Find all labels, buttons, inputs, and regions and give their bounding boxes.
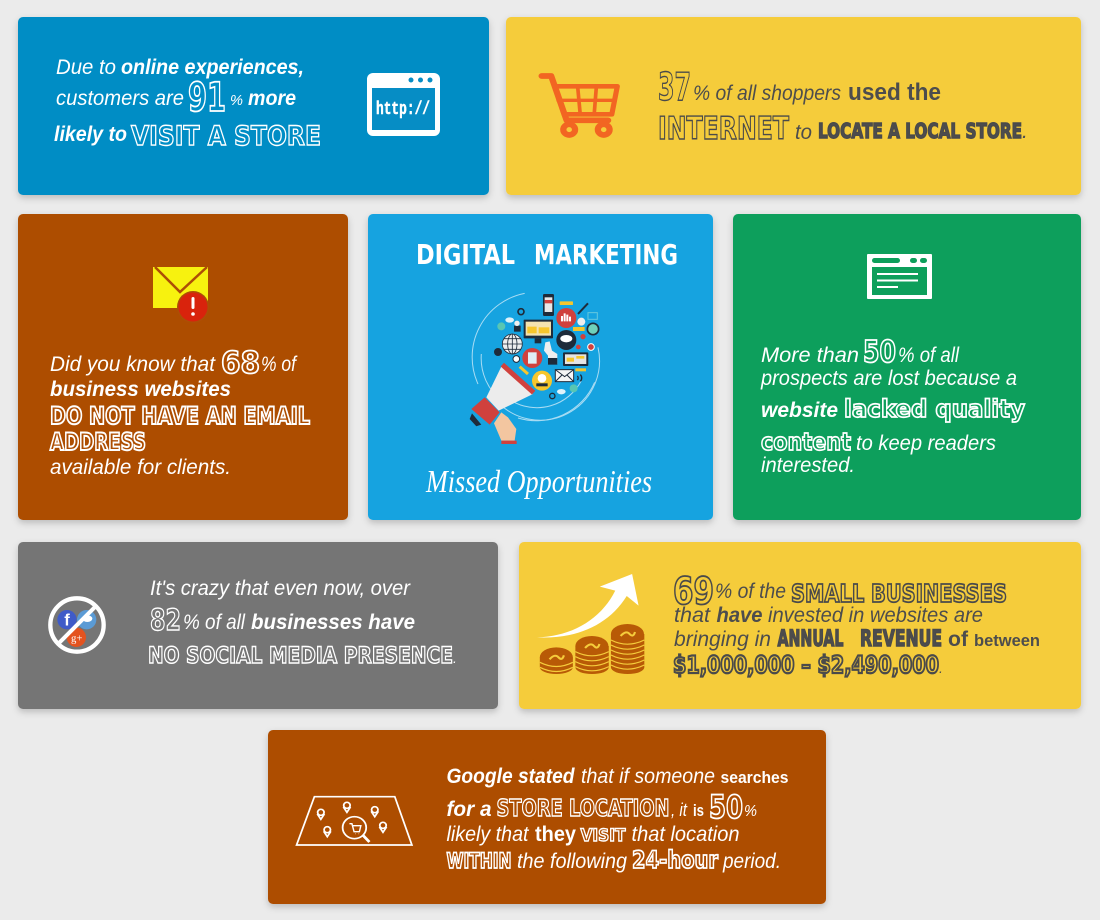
- text: revenue statistic: invested in websites are: [768, 604, 983, 627]
- text: revenue statistic: bringing in: [674, 628, 771, 651]
- text: social media statistic: It's crazy that even now, over: [150, 577, 411, 600]
- icon: map with search: [297, 797, 412, 845]
- text: lost prospects statistic: interested.: [761, 454, 855, 477]
- text: revenue statistic: .: [939, 660, 943, 676]
- text: google statistic: VISIT: [580, 826, 626, 846]
- text: lost prospects statistic: to keep readers: [856, 432, 996, 455]
- text: google statistic: Google stated: [446, 765, 576, 788]
- text: google statistic: the following: [517, 850, 627, 873]
- text: email statistic: DO NOT HAVE AN EMAIL: [50, 402, 310, 430]
- text: internet statistic: INTERNET: [658, 111, 789, 147]
- text: google statistic: WITHIN: [446, 849, 512, 873]
- text: internet statistic: % of all shoppers: [693, 82, 841, 105]
- text: google statistic: STORE LOCATION: [496, 796, 670, 822]
- text: social media statistic: .: [453, 650, 457, 666]
- text: revenue statistic: SMALL BUSINESSES: [791, 579, 1007, 608]
- text: visit a store statistic: 91: [188, 75, 226, 121]
- text: google statistic: period.: [722, 850, 781, 873]
- text: internet statistic: 37: [658, 65, 691, 109]
- text: visit a store statistic: customers are: [56, 87, 184, 110]
- icon: browser http: http://: [376, 100, 430, 120]
- text: google statistic: likely that: [446, 823, 530, 846]
- text: visit a store statistic: more: [248, 87, 296, 110]
- icon: coins with rising arrow: [537, 574, 644, 674]
- panel: no social media: [18, 542, 498, 709]
- text: revenue statistic: between: [974, 631, 1040, 650]
- text: email statistic: Did you know that: [50, 353, 216, 376]
- panel: no email address: [18, 214, 348, 520]
- text: social media statistic: businesses have: [251, 611, 415, 634]
- text: google statistic: is: [693, 801, 704, 820]
- text: revenue statistic: % of the: [715, 580, 786, 603]
- text: internet statistic: LOCATE A LOCAL STORE: [818, 119, 1022, 143]
- icon: social media prohibited: g+: [71, 633, 82, 644]
- text: internet statistic: [658, 65, 1028, 147]
- icon: social media prohibited: f: [64, 611, 70, 630]
- text: lost prospects statistic: % of all: [898, 344, 960, 367]
- panel: lost prospects: [733, 214, 1081, 520]
- text: internet statistic: used the: [848, 79, 941, 106]
- text: internet statistic: to: [795, 121, 812, 144]
- text: email statistic: ADDRESS: [50, 428, 146, 456]
- text: lost prospects statistic: lacked quality: [844, 395, 1025, 423]
- text: social media statistic: NO SOCIAL MEDIA PRESENCE: [148, 644, 453, 669]
- text: google statistic: that location: [632, 823, 740, 846]
- icon: browser http: [367, 73, 440, 136]
- text: internet statistic: .: [1022, 120, 1028, 143]
- text: google statistic: [446, 765, 788, 874]
- text: google statistic: that if someone: [581, 765, 715, 788]
- text: email statistic: 68: [221, 346, 260, 381]
- icon: envelope alert: [153, 267, 209, 323]
- text: visit a store statistic: online experiences,: [121, 56, 304, 79]
- text: social media statistic: 82: [150, 603, 181, 637]
- text: email statistic: available for clients.: [50, 456, 231, 479]
- text: lost prospects statistic: [760, 335, 1025, 477]
- text: revenue statistic: that: [674, 604, 711, 627]
- icon: social media prohibited: [50, 598, 104, 652]
- text: google statistic: they: [535, 823, 576, 846]
- title: DIGITAL: [416, 238, 515, 271]
- text: lost prospects statistic: website: [761, 399, 838, 422]
- text: email statistic: % of: [261, 353, 298, 376]
- text: visit a store statistic: %: [230, 92, 243, 109]
- text: email statistic: business websites: [50, 378, 231, 401]
- title: [416, 238, 678, 271]
- icon: web page: [867, 254, 932, 299]
- text: revenue statistic: [673, 570, 1040, 679]
- title: MARKETING: [534, 238, 678, 271]
- icon: shopping cart: [542, 76, 617, 135]
- text: google statistic: for a: [446, 798, 492, 821]
- text: email statistic: [50, 346, 310, 479]
- text: lost prospects statistic: prospects are lost because a: [760, 367, 1017, 390]
- text: revenue statistic: of: [948, 628, 969, 651]
- text: social media statistic: [148, 577, 457, 669]
- panel: locate a local store: [506, 17, 1081, 195]
- text: visit a store statistic: likely to: [54, 123, 127, 146]
- text: revenue statistic: have: [716, 604, 763, 627]
- text: lost prospects statistic: More than: [761, 344, 859, 367]
- text: google statistic: , it: [671, 800, 688, 820]
- text: google statistic: %: [744, 803, 757, 820]
- text: revenue statistic: 69: [673, 570, 714, 613]
- panel: google store search: [268, 730, 826, 904]
- illustration: megaphone with marketing icons: [470, 293, 600, 444]
- panel: visit a store: [18, 17, 489, 195]
- panel: digital marketing title: [368, 214, 713, 520]
- text: visit a store statistic: VISIT A STORE: [131, 121, 321, 152]
- text: google statistic: searches: [720, 768, 788, 787]
- subtitle: Missed Opportunities: [425, 463, 652, 499]
- panel: small business revenue: [519, 542, 1081, 709]
- text: google statistic: 50: [709, 788, 743, 826]
- text: social media statistic: % of all: [183, 611, 246, 634]
- text: visit a store statistic: Due to: [56, 56, 116, 79]
- text: revenue statistic: REVENUE: [860, 627, 942, 652]
- text: lost prospects statistic: content: [761, 428, 851, 456]
- text: google statistic: 24-hour: [632, 846, 718, 874]
- text: revenue statistic: ANNUAL: [778, 627, 844, 652]
- text: lost prospects statistic: 50: [863, 335, 896, 370]
- text: revenue statistic: $1,000,000 – $2,490,000: [673, 651, 939, 679]
- text: visit a store statistic: [54, 56, 321, 152]
